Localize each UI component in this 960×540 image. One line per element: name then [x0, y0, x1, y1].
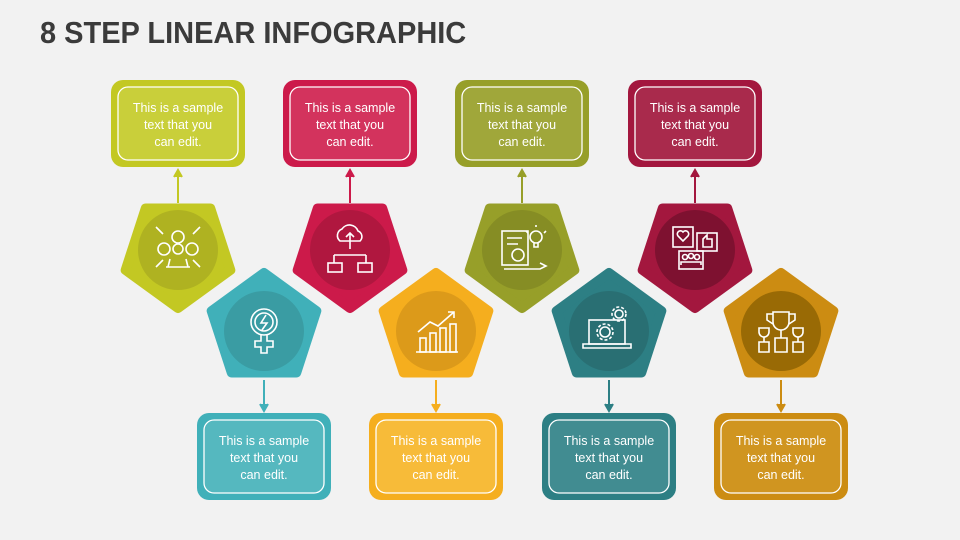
text box 5: can edit. — [498, 135, 546, 149]
text box 7: text that you — [661, 118, 729, 132]
pentagon 5 with icon — [470, 208, 574, 308]
step 4 — [369, 273, 503, 500]
arrow 3 — [346, 170, 354, 203]
arrow 5 — [518, 170, 526, 203]
text box 5 — [455, 80, 589, 167]
text box 6 — [542, 413, 676, 500]
pentagon 7 with icon — [643, 208, 747, 308]
arrow 6 — [605, 380, 613, 411]
text box 1: This is a sample — [133, 101, 223, 115]
arrow 2 — [260, 380, 268, 411]
step 1 — [111, 80, 245, 308]
step 6 — [542, 273, 676, 500]
arrow 4 — [432, 380, 440, 411]
pentagon 3 with icon — [298, 208, 402, 308]
text box 4: text that you — [402, 451, 470, 465]
text box 1: can edit. — [154, 135, 202, 149]
text box 8: can edit. — [757, 468, 805, 482]
step 7 — [628, 80, 762, 308]
arrow 7 — [691, 170, 699, 203]
pentagon 2 with icon — [212, 273, 316, 372]
text box 3: can edit. — [326, 135, 374, 149]
arrow 8 — [777, 380, 785, 411]
arrow 1 — [174, 170, 182, 203]
step 8 — [714, 273, 848, 500]
pentagon 6 with icon — [557, 273, 661, 372]
text box 8 — [714, 413, 848, 500]
title: 8 STEP LINEAR INFOGRAPHIC — [40, 15, 466, 50]
step 2 — [197, 273, 331, 500]
text box 2 — [197, 413, 331, 500]
step 5 — [455, 80, 589, 308]
text box 7 — [628, 80, 762, 167]
text box 8: This is a sample — [736, 434, 826, 448]
text box 5: text that you — [488, 118, 556, 132]
text box 3 — [283, 80, 417, 167]
text box 7: This is a sample — [650, 101, 740, 115]
pentagon 8 with icon — [729, 273, 833, 372]
text box 5: This is a sample — [477, 101, 567, 115]
text box 7: can edit. — [671, 135, 719, 149]
step 3 — [283, 80, 417, 308]
text box 3: This is a sample — [305, 101, 395, 115]
text box 8: text that you — [747, 451, 815, 465]
text box 1 — [111, 80, 245, 167]
text box 2: This is a sample — [219, 434, 309, 448]
pentagon 1 with icon — [126, 208, 230, 308]
text box 6: can edit. — [585, 468, 633, 482]
text box 2: text that you — [230, 451, 298, 465]
text box 1: text that you — [144, 118, 212, 132]
text box 4 — [369, 413, 503, 500]
pentagon 4 with icon — [384, 273, 488, 372]
text box 4: This is a sample — [391, 434, 481, 448]
text box 6: text that you — [575, 451, 643, 465]
text box 2: can edit. — [240, 468, 288, 482]
text box 3: text that you — [316, 118, 384, 132]
text box 6: This is a sample — [564, 434, 654, 448]
text box 4: can edit. — [412, 468, 460, 482]
